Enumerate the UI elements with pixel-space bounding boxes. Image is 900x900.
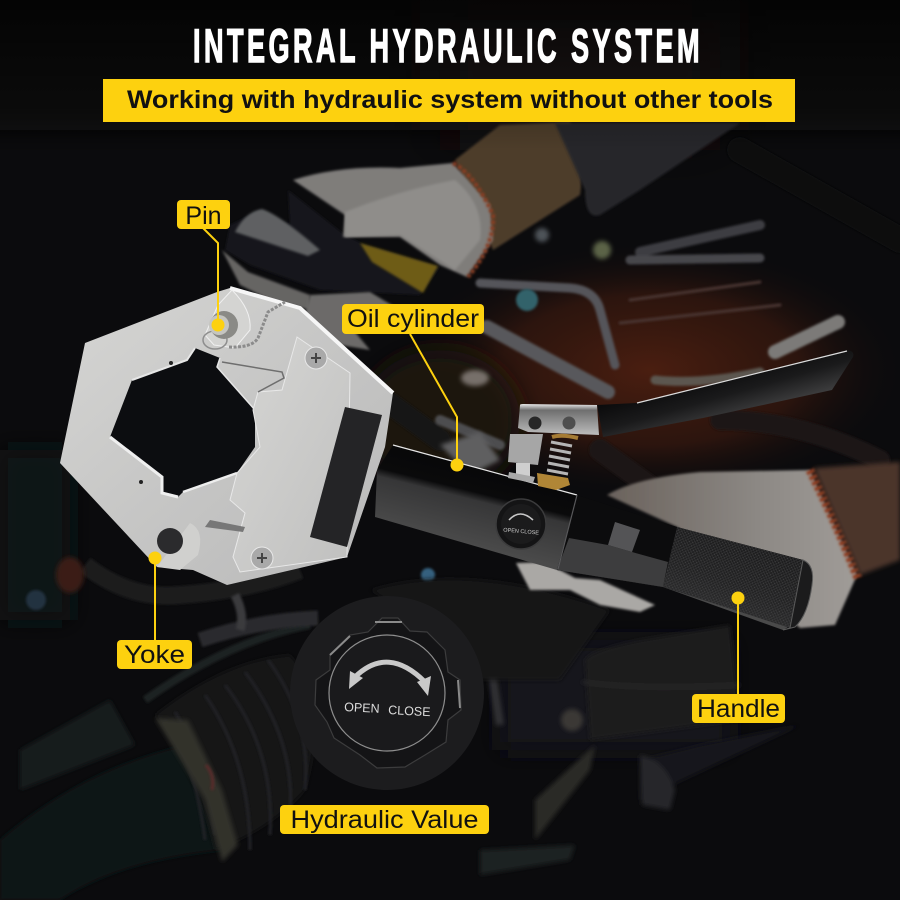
spring and valve post xyxy=(508,434,578,490)
callout: Handle xyxy=(692,592,785,723)
die opening xyxy=(110,348,255,497)
callout: Hydraulic Value: Hydraulic Value xyxy=(290,806,478,834)
callout: Oil cylinder: Oil cylinder xyxy=(347,305,479,333)
large hydraulic value knob detail xyxy=(290,596,484,790)
pump lever xyxy=(518,350,853,437)
knurled handle grip xyxy=(663,527,813,630)
glove palm xyxy=(293,163,493,277)
plate screws xyxy=(251,347,327,569)
callout: Handle: Handle xyxy=(697,695,780,723)
subtitle banner xyxy=(103,79,795,122)
callout: Pin xyxy=(177,200,230,332)
callout: Pin: Pin xyxy=(185,202,222,230)
sleeve xyxy=(455,122,581,250)
front clamp plate xyxy=(230,337,350,572)
small hydraulic valve knob xyxy=(496,499,546,549)
neck section of cylinder xyxy=(557,495,677,587)
background: engine parts lower right xyxy=(480,625,800,875)
background: engine pipes behind lever xyxy=(385,150,900,490)
background: intake hose and wires lower left xyxy=(0,557,318,900)
subtitle banner: Working with hydraulic system without other tools xyxy=(127,86,773,114)
lower fingers xyxy=(222,250,310,310)
glove cuff xyxy=(453,163,493,277)
knob label: OPEN xyxy=(344,700,380,716)
scalloped knob ring xyxy=(315,618,461,768)
large hydraulic value knob detail: CLOSE xyxy=(388,703,431,719)
yellow label on tool xyxy=(360,243,438,293)
crimper head xyxy=(60,288,393,585)
top darkening xyxy=(0,0,900,150)
callout: Yoke: Yoke xyxy=(124,641,185,669)
small hydraulic valve knob: OPEN CLOSE xyxy=(503,527,539,537)
callout: Oil cylinder xyxy=(342,304,484,472)
dark tool held in hand xyxy=(225,190,440,295)
yoke pin xyxy=(157,523,200,570)
black sticker panel xyxy=(310,407,382,547)
hydraulic crimper tool xyxy=(60,288,853,630)
rotation arrow xyxy=(349,662,431,696)
pivot pin with chain xyxy=(203,290,285,349)
head housing xyxy=(60,288,393,585)
oil cylinder body xyxy=(375,445,812,630)
background: upper gloved hand and sleeve xyxy=(222,122,740,350)
callout: Yoke xyxy=(117,552,192,669)
background: lower gloved hand xyxy=(516,462,900,628)
